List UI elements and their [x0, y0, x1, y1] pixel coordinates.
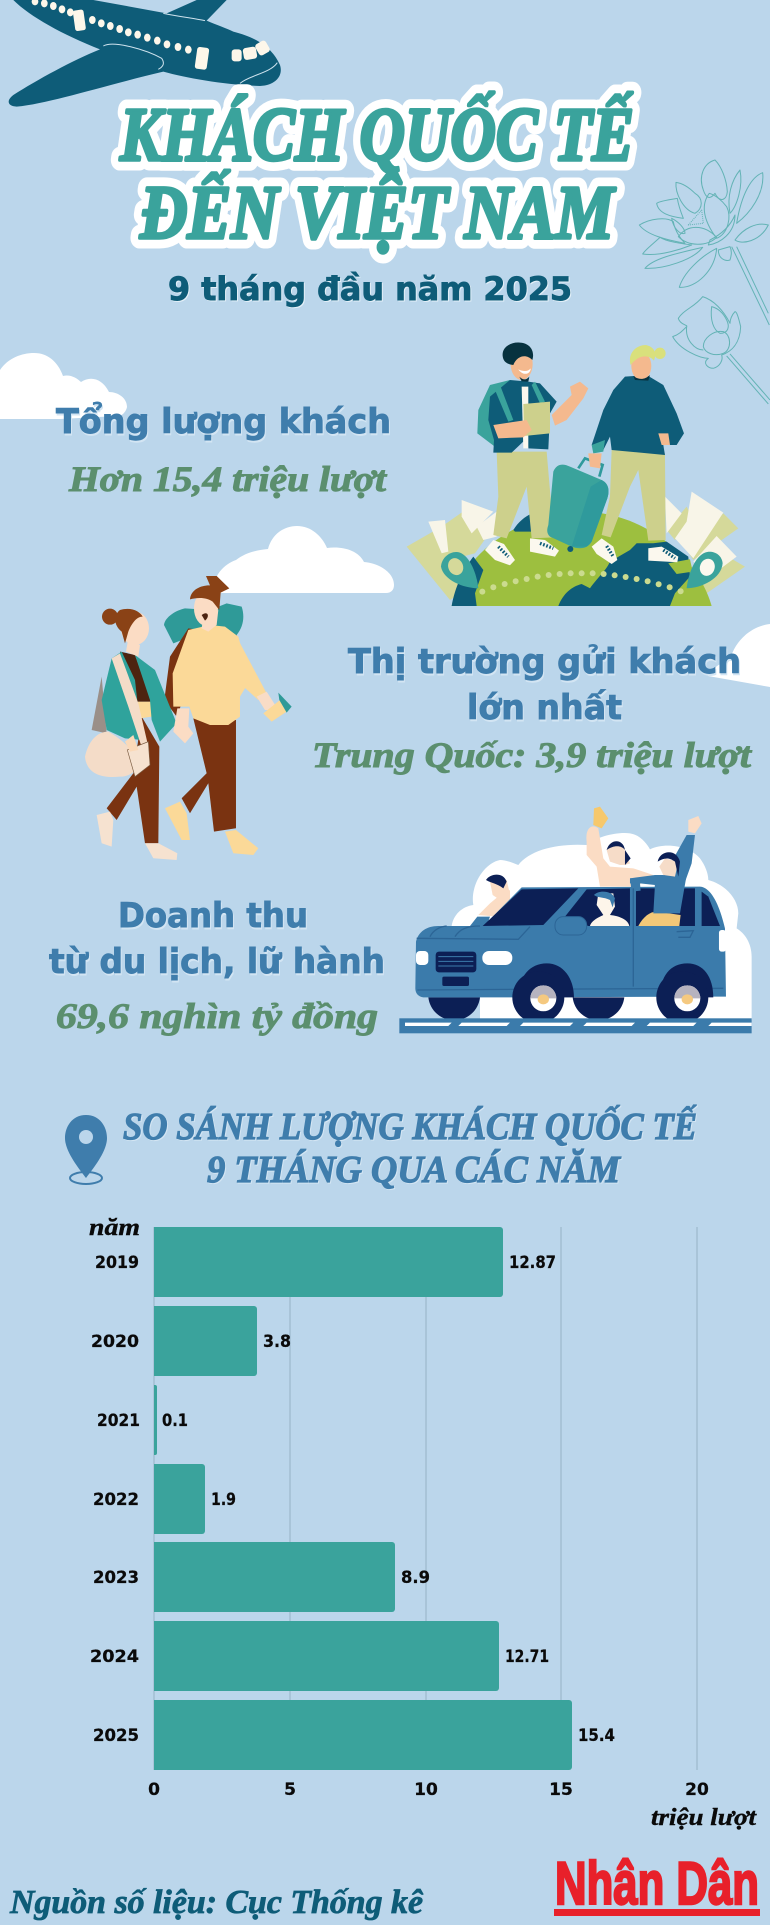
value labels: 12.87 — [509, 1253, 556, 1273]
illustration: two travellers on globe — [407, 343, 745, 606]
x axis unit: triệu lượt — [651, 1805, 757, 1831]
cloud middle — [214, 526, 394, 593]
value labels: 3.8 — [263, 1332, 291, 1352]
year labels: 2019 — [95, 1253, 139, 1273]
value labels: 0.1 — [162, 1411, 188, 1431]
icon: airplane — [9, 0, 281, 107]
heading: revenue — [49, 896, 385, 982]
x axis labels: 5 — [284, 1780, 296, 1800]
title — [119, 92, 634, 255]
title: KHÁCH QUỐC TẾ — [119, 92, 634, 177]
value: largest source market: Trung Quốc: 3,9 triệu lượt — [312, 735, 752, 775]
x axis labels: 15 — [549, 1780, 573, 1800]
icon: lotus flowers — [639, 160, 770, 404]
illustration: couple walking — [85, 576, 292, 860]
year labels — [90, 1253, 140, 1746]
subtitle: 9 tháng đầu năm 2025 — [168, 270, 572, 308]
value labels: 15.4 — [578, 1726, 615, 1746]
cloud right — [708, 624, 770, 687]
y axis title: năm — [89, 1215, 140, 1241]
value: revenue: 69,6 nghìn tỷ đồng — [56, 996, 378, 1036]
heading: revenue: Doanh thu — [118, 896, 308, 936]
year labels: 2023 — [93, 1568, 139, 1588]
value labels: 12.71 — [505, 1647, 549, 1667]
chart heading: SO SÁNH LƯỢNG KHÁCH QUỐC TẾ — [123, 1104, 697, 1148]
heading: largest source market: lớn nhất — [467, 688, 622, 728]
year labels: 2025 — [93, 1726, 139, 1746]
year labels: 2021 — [97, 1411, 140, 1431]
year labels: 2022 — [93, 1490, 139, 1510]
source note: Nguồn số liệu: Cục Thống kê — [9, 1884, 424, 1921]
value labels — [162, 1253, 615, 1746]
year labels: 2024 — [90, 1647, 139, 1667]
chart heading — [123, 1104, 697, 1191]
x axis labels: 0 — [148, 1780, 160, 1800]
x axis labels: 10 — [414, 1780, 438, 1800]
bars — [154, 1227, 572, 1770]
x axis labels — [148, 1780, 709, 1800]
value labels: 1.9 — [211, 1490, 236, 1510]
illustration: car with passengers — [399, 807, 752, 1033]
heading: revenue: từ du lịch, lữ hành — [49, 942, 385, 982]
cloud left — [0, 353, 127, 419]
title: KHÁCH QUỐC TẾ — [119, 92, 634, 177]
title: ĐẾN VIỆT NAM — [139, 170, 616, 255]
x axis labels: 20 — [685, 1780, 709, 1800]
heading: total visitors: Tổng lượng khách — [56, 401, 391, 442]
year labels: 2020 — [91, 1332, 139, 1352]
value labels: 8.9 — [401, 1568, 430, 1588]
heading: largest source market — [348, 642, 741, 728]
icon: location pin — [65, 1115, 107, 1184]
value: total visitors: Hơn 15,4 triệu lượt — [68, 459, 387, 499]
bar chart — [89, 1215, 757, 1831]
title: ĐẾN VIỆT NAM — [139, 170, 616, 255]
heading: largest source market: Thị trường gửi khách — [348, 642, 741, 682]
chart heading: 9 THÁNG QUA CÁC NĂM — [207, 1149, 621, 1191]
